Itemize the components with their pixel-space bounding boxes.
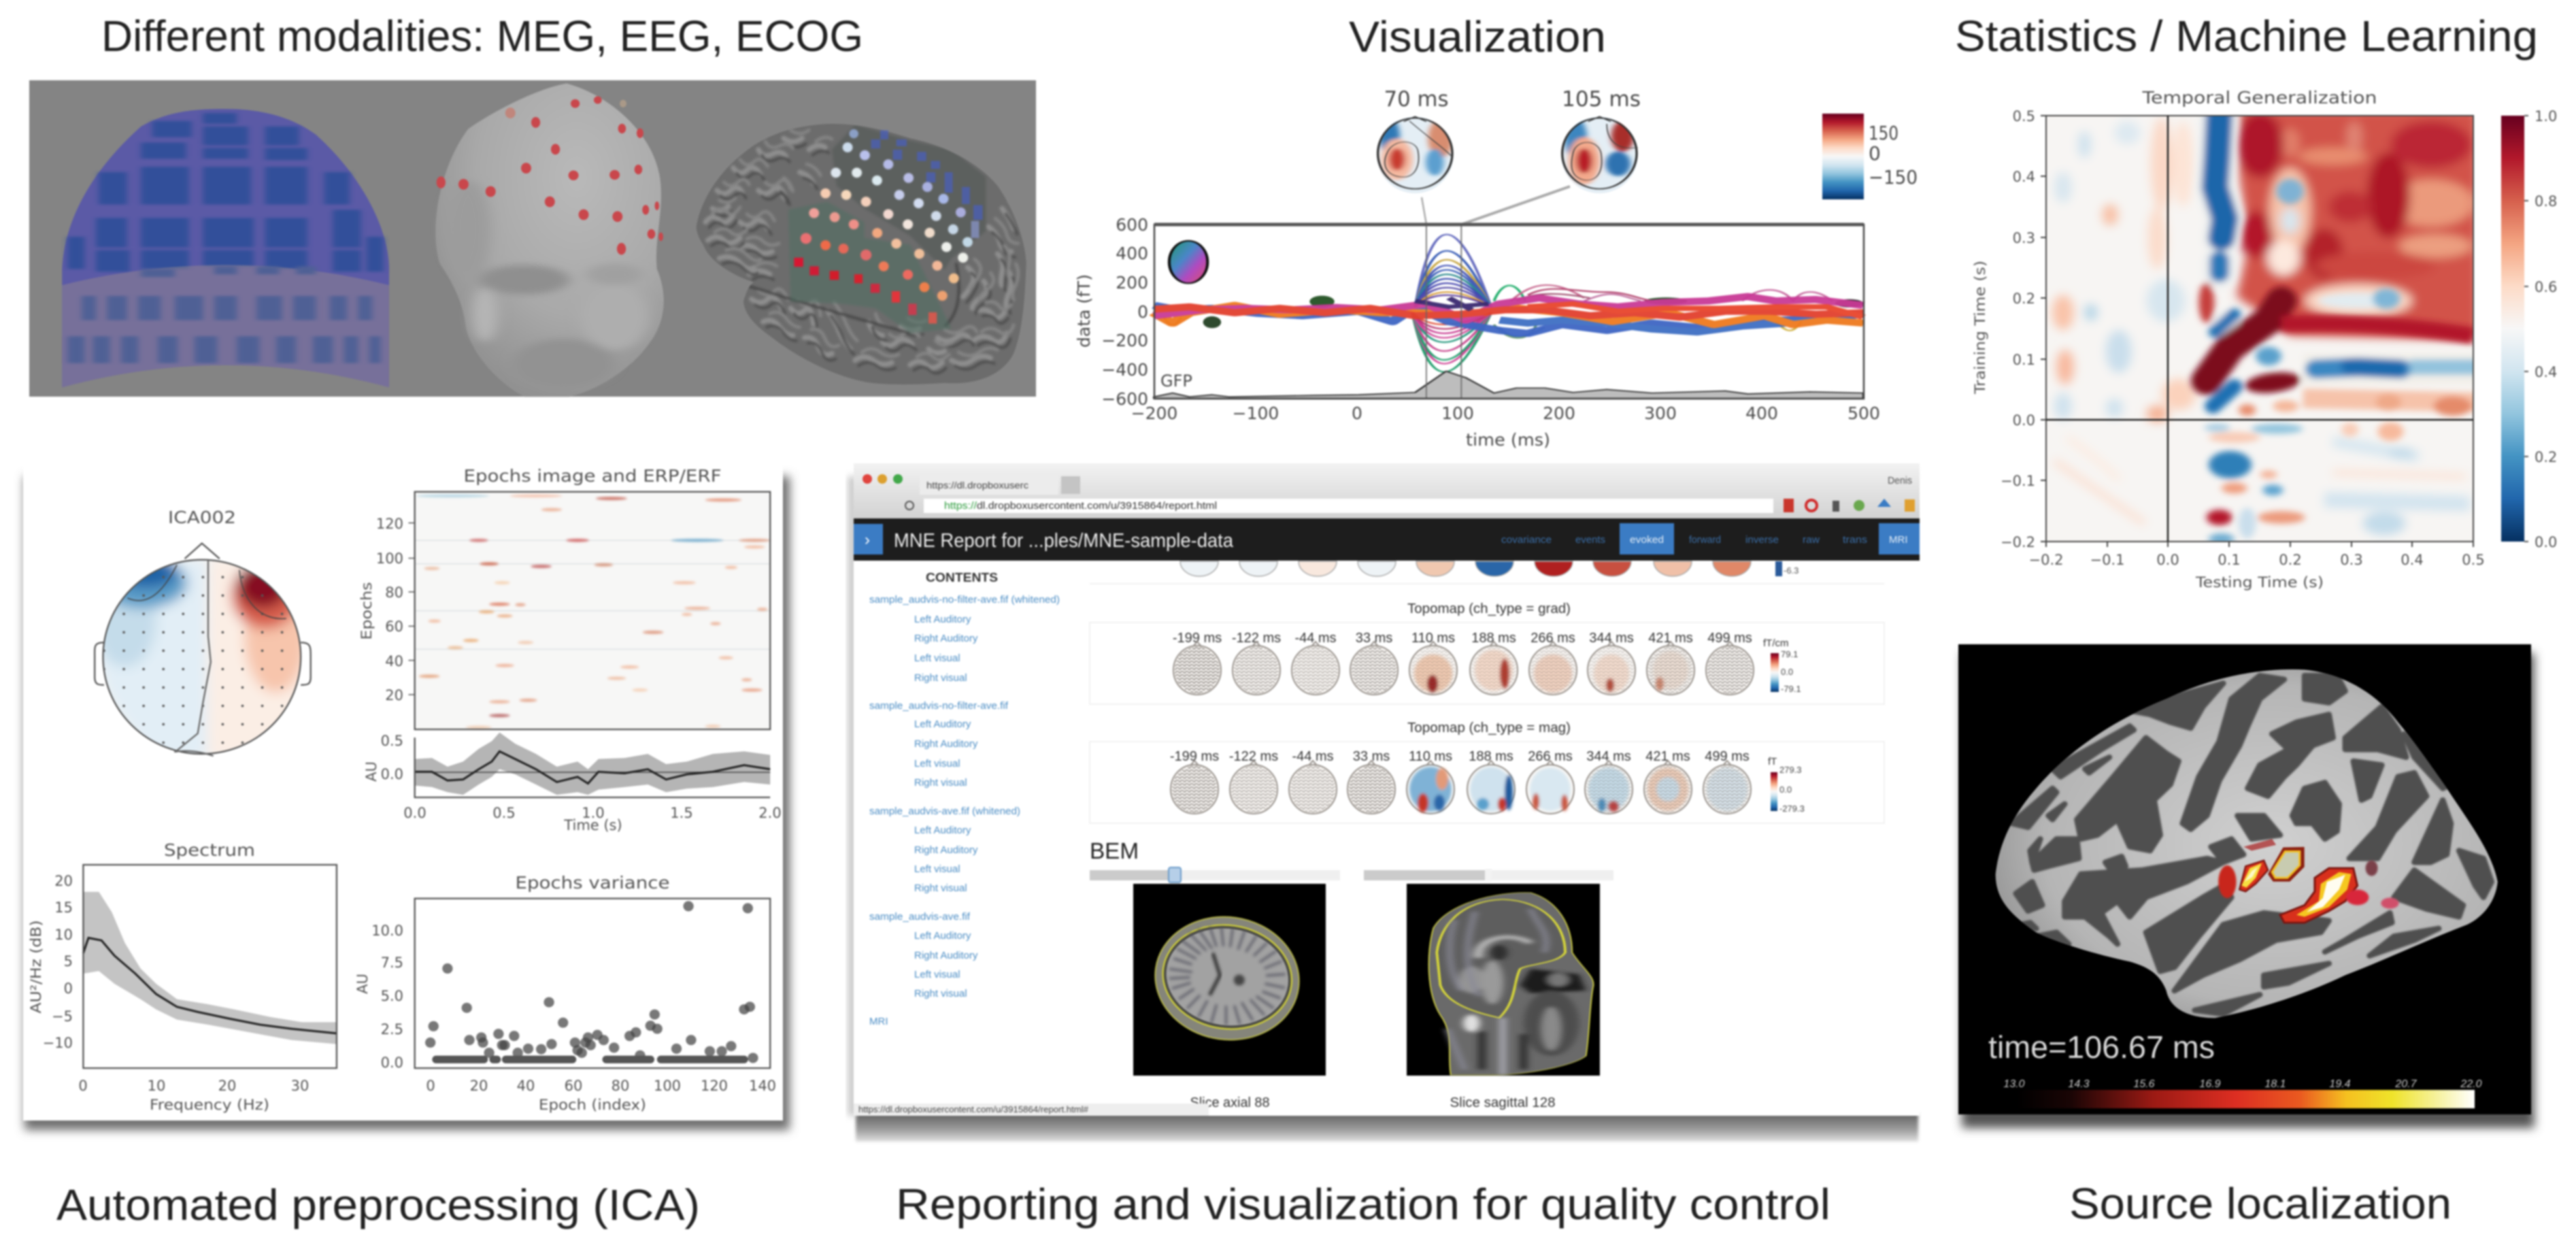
chart: spectrum: 10 [54, 927, 73, 943]
topomap row: mag: 110 ms [1409, 749, 1452, 764]
chart: epochs variance scatter: 10.0 [371, 923, 403, 939]
topomap row: mag: fT [1768, 756, 1777, 767]
navbar [854, 518, 1920, 561]
sidebar contents: MRI [869, 1016, 888, 1027]
sidebar contents: Right Auditory [914, 950, 978, 961]
topomap row: grad: -79.1 [1781, 684, 1801, 694]
sidebar contents: Right visual [914, 882, 967, 894]
sidebar contents: sample_audvis-ave.fif (whitened) [869, 806, 1020, 817]
heatmap axes: −0.2 [2001, 534, 2035, 550]
topomap row: grad [1173, 631, 1801, 695]
butterfly chart: −200 [1131, 403, 1177, 423]
sidebar contents: Left Auditory [914, 718, 971, 730]
butterfly chart: 0 [1137, 302, 1148, 322]
status bar [854, 1104, 1209, 1116]
heatmap axes: 0.2 [2013, 291, 2035, 307]
time label: time=106.67 ms [1988, 1029, 2215, 1065]
heatmap axes: 0.4 [2401, 552, 2424, 568]
sidebar contents: Left visual [914, 863, 960, 875]
topomap row: grad: fT/cm [1763, 637, 1789, 649]
sidebar contents: Left Auditory [914, 930, 971, 942]
heatmap [2046, 110, 2479, 544]
hot colorbar: 22.0 [2460, 1078, 2482, 1090]
topomap row: grad: -44 ms [1294, 631, 1337, 646]
colorbar: 150 [1869, 122, 1898, 144]
icon: ECOG brain with grid [697, 124, 1026, 384]
caption: reporting: Reporting and visualization for quality control [896, 1180, 1830, 1229]
navbar: › [865, 531, 870, 549]
heatmap axes: Training Time (s) [1972, 261, 1988, 395]
caption: source localization: Source localization [2069, 1179, 2452, 1228]
sidebar contents: sample_audvis-no-filter-ave.fif (whitened) [869, 594, 1060, 606]
chart: epochs image: Epochs [358, 582, 375, 640]
title: visualization: Visualization [1349, 12, 1606, 61]
chart: spectrum: 30 [291, 1078, 309, 1094]
chart: ERP trace: AU [363, 761, 380, 782]
chart: epochs variance scatter: Epoch (index) [539, 1097, 646, 1113]
butterfly chart: −100 [1233, 403, 1279, 423]
topomap row: mag: 188 ms [1469, 749, 1513, 764]
sidebar contents: sample_audvis-ave.fif [869, 911, 971, 923]
heatmap axes: 0.2 [2279, 552, 2302, 568]
hot colorbar [2003, 1078, 2482, 1108]
chart: ERP trace: 2.0 [758, 805, 782, 821]
slider: axial [1090, 867, 1340, 882]
topomap row: grad: 188 ms [1471, 631, 1516, 646]
heatmap colorbar: 0.4 [2535, 364, 2557, 380]
topomap row: mag: 33 ms [1353, 749, 1390, 764]
topomap row: mag: -122 ms [1229, 749, 1278, 764]
topomap: 105 ms [1561, 116, 1638, 193]
chart: epochs variance scatter: 60 [565, 1078, 582, 1094]
status bar: https://dl.dropboxusercontent.com/u/3915864/report.html# [858, 1104, 1089, 1114]
heatmap axes: 0.5 [2013, 108, 2035, 125]
chart: epochs variance scatter: 0.0 [381, 1055, 403, 1071]
topomap row: grad: 266 ms [1530, 631, 1575, 646]
navbar: forward [1689, 534, 1721, 546]
chart: spectrum: 5 [64, 953, 73, 969]
heatmap colorbar: 0.0 [2535, 534, 2557, 550]
chart: epochs image: 80 [385, 584, 403, 601]
butterfly chart: 600 [1116, 215, 1148, 235]
navbar: MRI [1889, 534, 1907, 546]
caption: automated preprocessing: Automated preprocessing (ICA) [56, 1180, 700, 1229]
activation hotspots [2218, 839, 2399, 923]
chart: spectrum: −5 [52, 1008, 73, 1025]
colorbar: −150 [1869, 166, 1918, 188]
butterfly chart: 200 [1543, 403, 1575, 423]
heatmap axes: −0.1 [2001, 473, 2035, 489]
topomap row: mag: -44 ms [1292, 749, 1334, 764]
chart: epochs variance scatter: 100 [654, 1078, 681, 1094]
sidebar contents: Left visual [914, 969, 960, 980]
chart: epochs image: 60 [385, 618, 403, 635]
hot colorbar: 13.0 [2003, 1078, 2025, 1090]
chart: epochs variance scatter: AU [354, 974, 371, 994]
topomap row: mag: 499 ms [1705, 749, 1750, 764]
topomap row: grad: -199 ms [1173, 631, 1222, 646]
partial topomap row under navbar: -6.3 [1784, 565, 1799, 576]
chart: epochs variance scatter [354, 873, 776, 1113]
icon: EEG head with electrodes [435, 84, 664, 397]
heatmap axes: 0.5 [2462, 552, 2485, 568]
chart: epochs image: 120 [376, 516, 403, 532]
panel: temporal generalization heatmap [1972, 88, 2557, 591]
hot colorbar: 19.4 [2329, 1078, 2351, 1090]
navbar: trans [1843, 534, 1867, 546]
topomap row: grad: 33 ms [1356, 631, 1392, 646]
chart: epochs variance scatter: 120 [701, 1078, 728, 1094]
chart: epochs variance scatter: 7.5 [381, 955, 403, 971]
chart: ERP trace: Time (s) [563, 817, 622, 833]
topomap row: mag: -199 ms [1170, 749, 1219, 764]
sidebar contents: Left Auditory [914, 614, 971, 625]
heatmap axes: 0.1 [2013, 352, 2035, 368]
topomap row: mag [1170, 749, 1805, 814]
panel: evoked butterfly visualization [1074, 87, 1918, 450]
sidebar contents: Right Auditory [914, 844, 978, 856]
chart: ERP trace: 0.5 [381, 733, 403, 749]
chart: epochs variance scatter: 0 [426, 1078, 435, 1094]
butterfly chart: 300 [1644, 403, 1677, 423]
butterfly chart: −200 [1101, 331, 1148, 350]
chart: epochs image [358, 466, 770, 729]
topomap row: grad: 79.1 [1781, 649, 1798, 659]
chart: epochs image: Epochs image and ERP/ERF [464, 466, 721, 486]
panel: modalities renderings [29, 80, 1036, 397]
butterfly chart: 0 [1352, 403, 1362, 423]
icon: MEG helmet [62, 109, 389, 387]
butterfly chart [1074, 215, 1880, 450]
topomap row: grad: 0.0 [1781, 667, 1793, 677]
topomap row: mag: 266 ms [1528, 749, 1573, 764]
panel: source localization [1958, 644, 2535, 1128]
heatmap axes [1972, 108, 2485, 591]
topomap row: grad: 344 ms [1589, 631, 1634, 646]
butterfly chart: −400 [1101, 360, 1148, 380]
chart: spectrum: Frequency (Hz) [150, 1097, 269, 1113]
butterfly chart: 500 [1847, 403, 1880, 423]
chart: epochs image: 40 [385, 653, 403, 669]
butterfly chart: 400 [1116, 244, 1148, 263]
topomap row: grad: 110 ms [1411, 631, 1455, 646]
colorbar: 0 [1869, 142, 1881, 165]
butterfly chart: data (fT) [1074, 274, 1094, 348]
sidebar contents: Right visual [914, 777, 967, 789]
navbar: MNE Report for ...ples/MNE-sample-data [894, 530, 1234, 552]
chart: ERP trace: 0.0 [403, 805, 426, 821]
chart: spectrum: −10 [43, 1035, 73, 1051]
butterfly chart: 100 [1441, 403, 1474, 423]
slider: sagittal [1364, 869, 1613, 881]
browser chrome: https://dl.dropboxusercontent.com/u/3915864/report.html [944, 500, 1217, 512]
hot colorbar: 18.1 [2264, 1078, 2286, 1090]
chart: spectrum [28, 840, 337, 1113]
butterfly chart: time (ms) [1466, 430, 1550, 450]
colorbar [1822, 114, 1918, 199]
heatmap colorbar: 0.8 [2535, 193, 2557, 210]
panel: browser report window [848, 463, 1920, 1142]
topomap: 70 ms [1377, 116, 1454, 193]
navbar: inverse [1745, 534, 1779, 546]
browser chrome [854, 463, 1920, 518]
topomap row: mag: -279.3 [1779, 803, 1805, 814]
heatmap axes: 0.0 [2156, 552, 2179, 568]
heading: topomap mag: Topomap (ch_type = mag) [1407, 720, 1571, 735]
chart: spectrum: 0 [78, 1078, 88, 1094]
topomap row: mag: 0.0 [1779, 784, 1792, 795]
heatmap colorbar: 0.2 [2535, 449, 2557, 465]
topomap: ICA002: ICA002 [168, 508, 236, 527]
sidebar contents: Left visual [914, 652, 960, 664]
navbar: evoked [1630, 534, 1664, 546]
sidebar contents: Right visual [914, 988, 967, 999]
hot colorbar: 14.3 [2068, 1078, 2090, 1090]
butterfly chart: GFP [1160, 371, 1192, 391]
sidebar contents: sample_audvis-no-filter-ave.fif [869, 700, 1009, 712]
chart: ERP trace: 0.0 [381, 766, 403, 782]
chart: epochs image: 100 [376, 550, 403, 567]
title: modalities: Different modalities: MEG, EEG, ECOG [101, 12, 863, 61]
heatmap axes: 0.3 [2013, 230, 2035, 246]
butterfly chart: 200 [1116, 273, 1148, 293]
topomap row: mag: 279.3 [1779, 765, 1802, 775]
butterfly chart: 400 [1745, 403, 1778, 423]
panel: ICA preprocessing figure [23, 463, 790, 1130]
hot colorbar: 15.6 [2133, 1078, 2155, 1090]
sidebar contents: Left visual [914, 758, 960, 769]
navbar: raw [1803, 534, 1820, 546]
heatmap colorbar: 0.6 [2535, 279, 2557, 295]
chart: epochs variance scatter: 20 [470, 1078, 488, 1094]
MRI: sagittal slice [1407, 884, 1600, 1076]
navbar: events [1575, 534, 1605, 546]
sidebar contents: CONTENTS [926, 571, 998, 584]
topomap row: grad: 499 ms [1707, 631, 1752, 646]
chart: epochs image: 20 [385, 687, 403, 703]
heatmap axes: 0.4 [2013, 169, 2035, 185]
topomap row: mag: 344 ms [1586, 749, 1631, 764]
topomap row: grad: 421 ms [1648, 631, 1693, 646]
chart: spectrum: 20 [218, 1078, 236, 1094]
connector lines to topomaps [1422, 186, 1570, 225]
chart: epochs variance scatter: 80 [612, 1078, 629, 1094]
chart title: Temporal Generalization [2141, 88, 2377, 107]
heatmap axes: 0.1 [2218, 552, 2241, 568]
heatmap axes: 0.3 [2340, 552, 2363, 568]
chart: epochs variance scatter: 140 [749, 1078, 776, 1094]
butterfly chart: −600 [1101, 389, 1148, 409]
inflated brain surface [1996, 669, 2498, 1018]
heatmap axes: 0.0 [2013, 412, 2035, 429]
topomap row: grad: -122 ms [1232, 631, 1281, 646]
label: 105 ms: 105 ms [1562, 87, 1641, 112]
MRI: axial slice [1133, 884, 1326, 1076]
chart: spectrum: 0 [64, 980, 73, 997]
label: 70 ms: 70 ms [1384, 87, 1449, 112]
heatmap axes: Testing Time (s) [2195, 574, 2324, 591]
heatmap axes: −0.2 [2028, 552, 2064, 568]
heatmap axes: −0.1 [2090, 552, 2125, 568]
hot colorbar: 20.7 [2394, 1078, 2418, 1090]
chart: spectrum: AU²/Hz (dB) [28, 920, 44, 1014]
chart: epochs variance scatter: 40 [517, 1078, 535, 1094]
chart: ERP trace [363, 733, 782, 833]
browser chrome: Denis [1888, 475, 1912, 486]
chart: spectrum: 20 [54, 873, 73, 889]
chart: spectrum: 15 [54, 899, 73, 916]
navbar: covariance [1501, 534, 1552, 546]
topomap row: mag: 421 ms [1645, 749, 1690, 764]
caption: slice axial: Slice axial 88 [1190, 1095, 1269, 1110]
caption: slice sagittal: Slice sagittal 128 [1450, 1095, 1555, 1110]
chart: spectrum: 10 [148, 1078, 165, 1094]
sidebar contents: Right Auditory [914, 738, 978, 750]
heading: topomap grad: Topomap (ch_type = grad) [1407, 601, 1571, 616]
sidebar contents: Right Auditory [914, 633, 978, 644]
sidebar contents: Left Auditory [914, 825, 971, 836]
chart: ERP trace: 1.0 [582, 805, 605, 821]
chart: spectrum: Spectrum [164, 840, 255, 860]
partial topomap row under navbar [1090, 561, 1884, 823]
heatmap colorbar: 1.0 [2535, 108, 2557, 125]
chart: ERP trace: 0.5 [492, 805, 516, 821]
chart: epochs variance scatter: 5.0 [381, 988, 403, 1004]
chart: epochs variance scatter: Epochs variance [516, 873, 669, 893]
browser chrome: https://dl.dropboxuserc [926, 480, 1028, 491]
heatmap colorbar [2501, 108, 2557, 550]
chart: epochs variance scatter: 2.5 [381, 1021, 403, 1038]
hot colorbar: 16.9 [2199, 1078, 2221, 1090]
heading: BEM: BEM [1090, 838, 1139, 863]
sidebar contents [869, 571, 1060, 1027]
sidebar contents: Right visual [914, 672, 967, 684]
title: statistics: Statistics / Machine Learning [1955, 12, 2538, 61]
chart: ERP trace: 1.5 [670, 805, 693, 821]
topomap: ICA002 [94, 508, 311, 759]
